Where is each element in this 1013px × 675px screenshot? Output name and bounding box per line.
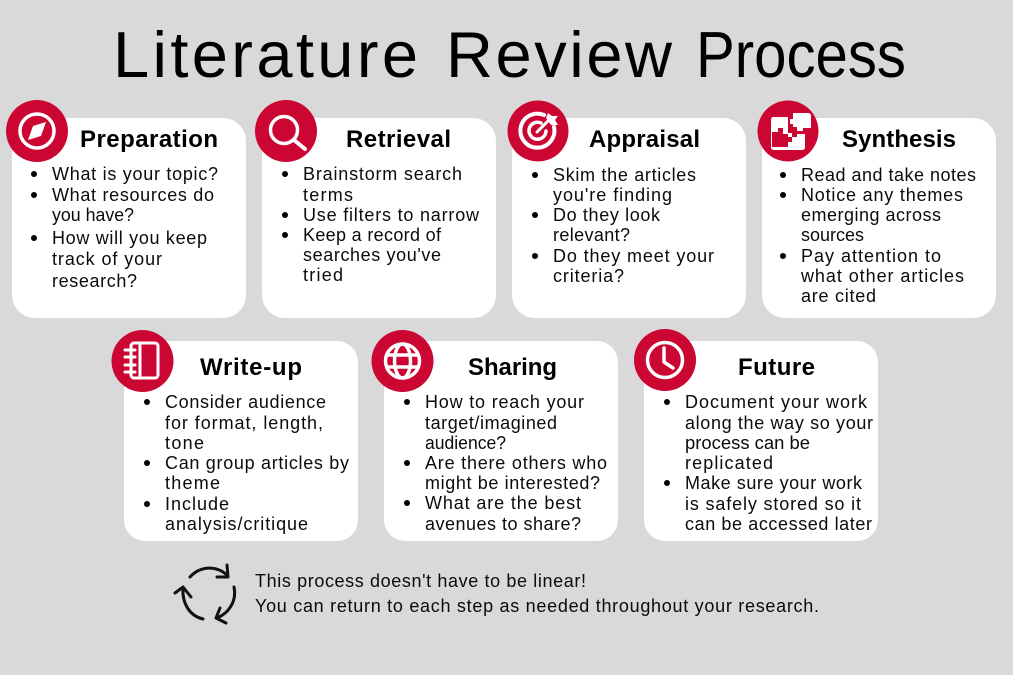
text: sharing bullets: might be interested?: [425, 473, 600, 493]
text: retrieval bullets: Use filters to narrow: [303, 205, 480, 225]
text: write-up bullets: theme: [165, 473, 220, 493]
text: future bullets: is safely stored so it: [685, 494, 861, 514]
text: write-up bullets: Include: [165, 494, 229, 514]
text: preparation bullets: How will you keep: [52, 228, 207, 248]
text: retrieval bullets: tried: [303, 265, 343, 285]
text: write-up bullets: tone: [165, 433, 204, 453]
heading: retrieval: Retrieval: [346, 126, 451, 153]
text: write-up bullets: Can group articles by: [165, 453, 349, 473]
text: synthesis bullets: [780, 165, 976, 306]
text: future bullets: Make sure your work: [685, 473, 863, 493]
text: future bullets: process can be: [685, 433, 810, 453]
text: sharing bullets: [404, 392, 607, 534]
text: future bullets: along the way so your: [685, 413, 873, 433]
callout: non-linear note: This process doesn't have to be linear!: [255, 571, 586, 591]
text: retrieval bullets: searches you've: [303, 245, 441, 265]
text: future bullets: replicated: [685, 453, 773, 473]
panel: sharing: [372, 330, 618, 541]
text: sharing bullets: Are there others who: [425, 453, 607, 473]
text: synthesis bullets: what other articles: [800, 266, 964, 286]
title: Process: [696, 18, 906, 91]
icon: puzzle: [758, 100, 818, 162]
title: Literature: [113, 18, 418, 91]
icon: notebook: [112, 330, 174, 392]
text: appraisal bullets: Do they meet your: [553, 246, 714, 266]
text: synthesis bullets: Pay attention to: [801, 246, 941, 266]
text: preparation bullets: research?: [52, 271, 137, 291]
text: retrieval bullets: [282, 164, 480, 285]
panel: write-up: [112, 330, 358, 541]
icon: clock: [634, 329, 696, 391]
text: retrieval bullets: Brainstorm search: [303, 164, 462, 184]
text: write-up bullets: for format, length,: [165, 413, 323, 433]
heading: synthesis: Synthesis: [842, 126, 956, 153]
text: future bullets: can be accessed later: [685, 514, 872, 534]
heading: write-up: Write-up: [200, 354, 302, 381]
text: appraisal bullets: you're finding: [553, 185, 672, 205]
text: future bullets: Document your work: [685, 392, 868, 412]
panel: preparation: [6, 100, 246, 318]
text: appraisal bullets: Do they look: [553, 205, 661, 225]
text: sharing bullets: How to reach your: [425, 392, 584, 412]
text: write-up bullets: [144, 392, 349, 534]
heading: future: Future: [738, 354, 815, 381]
text: preparation bullets: What resources do: [52, 185, 214, 205]
heading: sharing: Sharing: [468, 354, 557, 381]
text: synthesis bullets: emerging across: [801, 205, 941, 225]
icon: globe: [372, 330, 434, 392]
text: preparation bullets: What is your topic?: [52, 164, 218, 184]
callout: non-linear note: You can return to each step as needed throughout your research.: [255, 596, 819, 616]
text: future bullets: [664, 392, 873, 534]
icon: magnifying glass: [255, 100, 317, 162]
text: sharing bullets: avenues to share?: [425, 514, 581, 534]
text: appraisal bullets: Skim the articles: [553, 165, 696, 185]
text: preparation bullets: track of your: [52, 249, 162, 269]
text: synthesis bullets: sources: [801, 225, 864, 245]
heading: appraisal: Appraisal: [589, 126, 700, 153]
text: sharing bullets: target/imagined: [425, 413, 557, 433]
panel: retrieval: [255, 100, 496, 318]
text: retrieval bullets: Keep a record of: [303, 225, 442, 245]
text: preparation bullets: you have?: [52, 205, 134, 225]
icon: target: [508, 100, 568, 162]
text: write-up bullets: Consider audience: [165, 392, 326, 412]
text: synthesis bullets: are cited: [801, 286, 876, 306]
text: preparation bullets: [31, 164, 218, 291]
icon: cycle arrows: [175, 565, 235, 623]
callout: non-linear note: [255, 571, 819, 616]
text: synthesis bullets: Read and take notes: [801, 165, 976, 185]
text: synthesis bullets: Notice any themes: [801, 185, 963, 205]
title: Review: [446, 18, 673, 91]
panel: appraisal: [508, 100, 746, 318]
text: retrieval bullets: terms: [303, 185, 353, 205]
icon: compass: [6, 100, 68, 162]
heading: preparation: Preparation: [80, 126, 218, 153]
text: write-up bullets: analysis/critique: [165, 514, 308, 534]
panel: synthesis: [758, 100, 996, 318]
text: sharing bullets: audience?: [425, 433, 506, 453]
text: sharing bullets: What are the best: [425, 493, 581, 513]
text: appraisal bullets: relevant?: [553, 225, 630, 245]
panel: future: [634, 329, 878, 541]
text: appraisal bullets: [532, 165, 714, 286]
text: appraisal bullets: criteria?: [553, 266, 624, 286]
title: [113, 18, 906, 91]
